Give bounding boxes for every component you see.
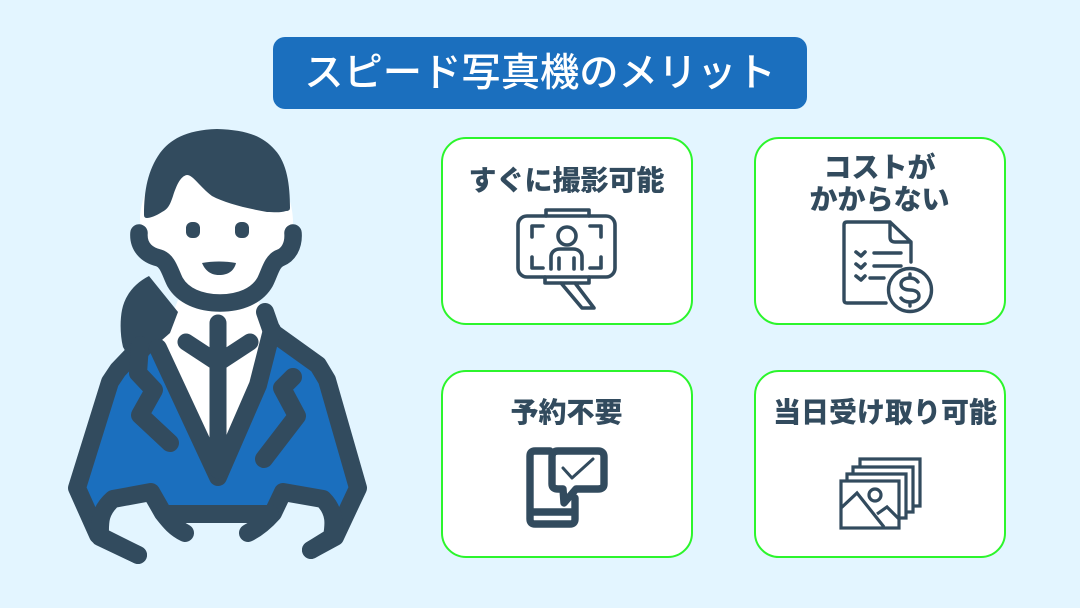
panel: すぐに撮影可能 — [441, 137, 693, 325]
face — [140, 145, 293, 303]
title banner: スピード写真機のメリット — [304, 51, 776, 95]
heading: 予約不要 — [510, 397, 622, 428]
heading: かからない — [809, 184, 950, 215]
jacket fill — [77, 330, 358, 530]
left lapel — [138, 345, 170, 443]
shirt — [160, 300, 270, 477]
panel: 予約不要 — [441, 370, 693, 558]
hair — [144, 129, 290, 218]
heading: コストが — [823, 152, 936, 183]
heading: 当日受け取り可能 — [773, 397, 997, 428]
hands and hem — [100, 492, 185, 555]
panel: 当日受け取り可能 — [754, 370, 1006, 558]
heading — [809, 152, 950, 215]
jacket outline — [77, 347, 140, 555]
ears and jaw — [139, 233, 293, 303]
neckline — [158, 330, 272, 477]
mouth — [202, 262, 236, 275]
title banner — [273, 37, 807, 109]
panel: コストがかからない — [754, 137, 1006, 325]
right lapel — [264, 377, 297, 459]
eyes — [186, 222, 200, 238]
ponytail — [121, 276, 178, 370]
heading: すぐに撮影可能 — [468, 165, 664, 196]
tie and collar — [186, 323, 250, 470]
